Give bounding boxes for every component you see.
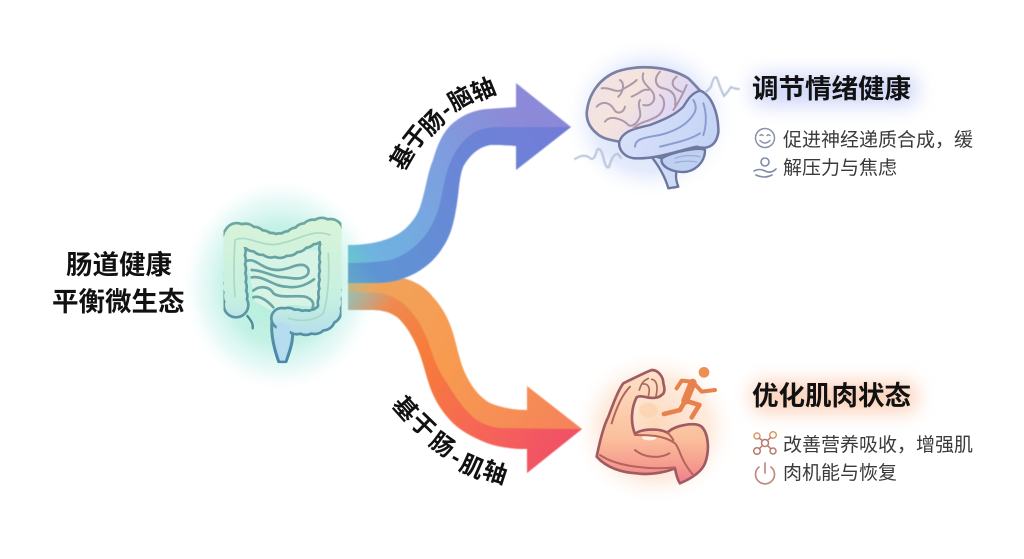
colon fill continuous <box>233 230 332 323</box>
heading: mood health: 调节情绪健康 <box>752 74 911 104</box>
heading: muscle state: 优化肌肉状态 <box>752 381 911 411</box>
label: gut-muscle axis: 基 <box>387 391 423 427</box>
finger lines <box>639 378 657 396</box>
label: gut-brain axis: - <box>434 97 457 123</box>
temporal lobe <box>619 91 718 158</box>
label: gut-brain axis: 轴 <box>467 73 500 107</box>
text: mood benefits: 促进神经递质合成，缓 <box>783 129 973 151</box>
arrow: gut-brain axis <box>348 83 571 283</box>
cerebellum lines <box>675 156 700 163</box>
glow: brain <box>562 36 738 200</box>
icon: smile <box>756 128 774 148</box>
text: muscle benefits: 改善营养吸收，增强肌 <box>783 434 973 456</box>
icon: power <box>756 463 774 484</box>
label: gut-muscle axis: 肠 <box>424 427 459 463</box>
peach glow behind <box>639 403 658 417</box>
icon: intestine <box>233 230 332 362</box>
icon: runner <box>664 367 715 417</box>
label: gut-muscle axis: - <box>446 444 466 471</box>
heading: mood glow <box>752 74 917 106</box>
text: mood benefits <box>783 129 973 179</box>
text: mood benefits: 解压力与焦虑 <box>783 157 897 179</box>
inner colon stripe <box>234 233 330 320</box>
colon fill scallops <box>233 230 332 323</box>
icon: flexed arm <box>597 370 708 483</box>
main heading <box>52 250 184 317</box>
cerebellum <box>662 149 705 172</box>
muscle lines <box>600 387 693 475</box>
glow: gut <box>180 177 380 393</box>
rectum <box>272 317 293 362</box>
arm silhouette <box>597 370 708 483</box>
main heading: 平衡微生态 <box>52 287 184 317</box>
label: gut-brain axis: 肠 <box>415 105 451 141</box>
cerebrum <box>587 67 718 158</box>
icon: network <box>754 432 776 454</box>
text: muscle benefits <box>783 434 973 484</box>
main heading: 肠道健康 <box>66 250 172 280</box>
temporal folds <box>635 100 706 147</box>
label: gut-muscle axis: 于 <box>405 408 441 444</box>
bicep highlight <box>642 434 657 440</box>
label: gut-muscle axis <box>387 391 510 490</box>
label: gut-brain axis: 基 <box>386 141 421 175</box>
icon: brain wave right <box>706 77 739 96</box>
glow: muscle <box>571 350 739 506</box>
cortex folds <box>597 72 687 128</box>
label: gut-brain axis: 脑 <box>444 82 478 117</box>
icon: brain wave left <box>575 149 621 168</box>
colon outline scallops <box>233 230 332 323</box>
label: gut-brain axis <box>386 73 500 175</box>
rectum lower <box>277 322 290 361</box>
brain stem <box>650 155 680 188</box>
label: gut-brain axis: 于 <box>398 120 434 156</box>
icon: calm person <box>754 158 776 177</box>
icon: brain <box>587 67 718 188</box>
heading: muscle glow <box>752 381 917 413</box>
text: muscle benefits: 肉机能与恢复 <box>783 462 897 484</box>
appendix <box>247 316 253 328</box>
arrow: gut-muscle axis <box>348 278 582 473</box>
small intestine coils <box>247 260 314 307</box>
small intestine area <box>245 250 320 312</box>
colon outline continuous <box>233 230 332 323</box>
label: gut-muscle axis: 肌 <box>455 450 488 485</box>
label: gut-muscle axis: 轴 <box>479 457 510 490</box>
